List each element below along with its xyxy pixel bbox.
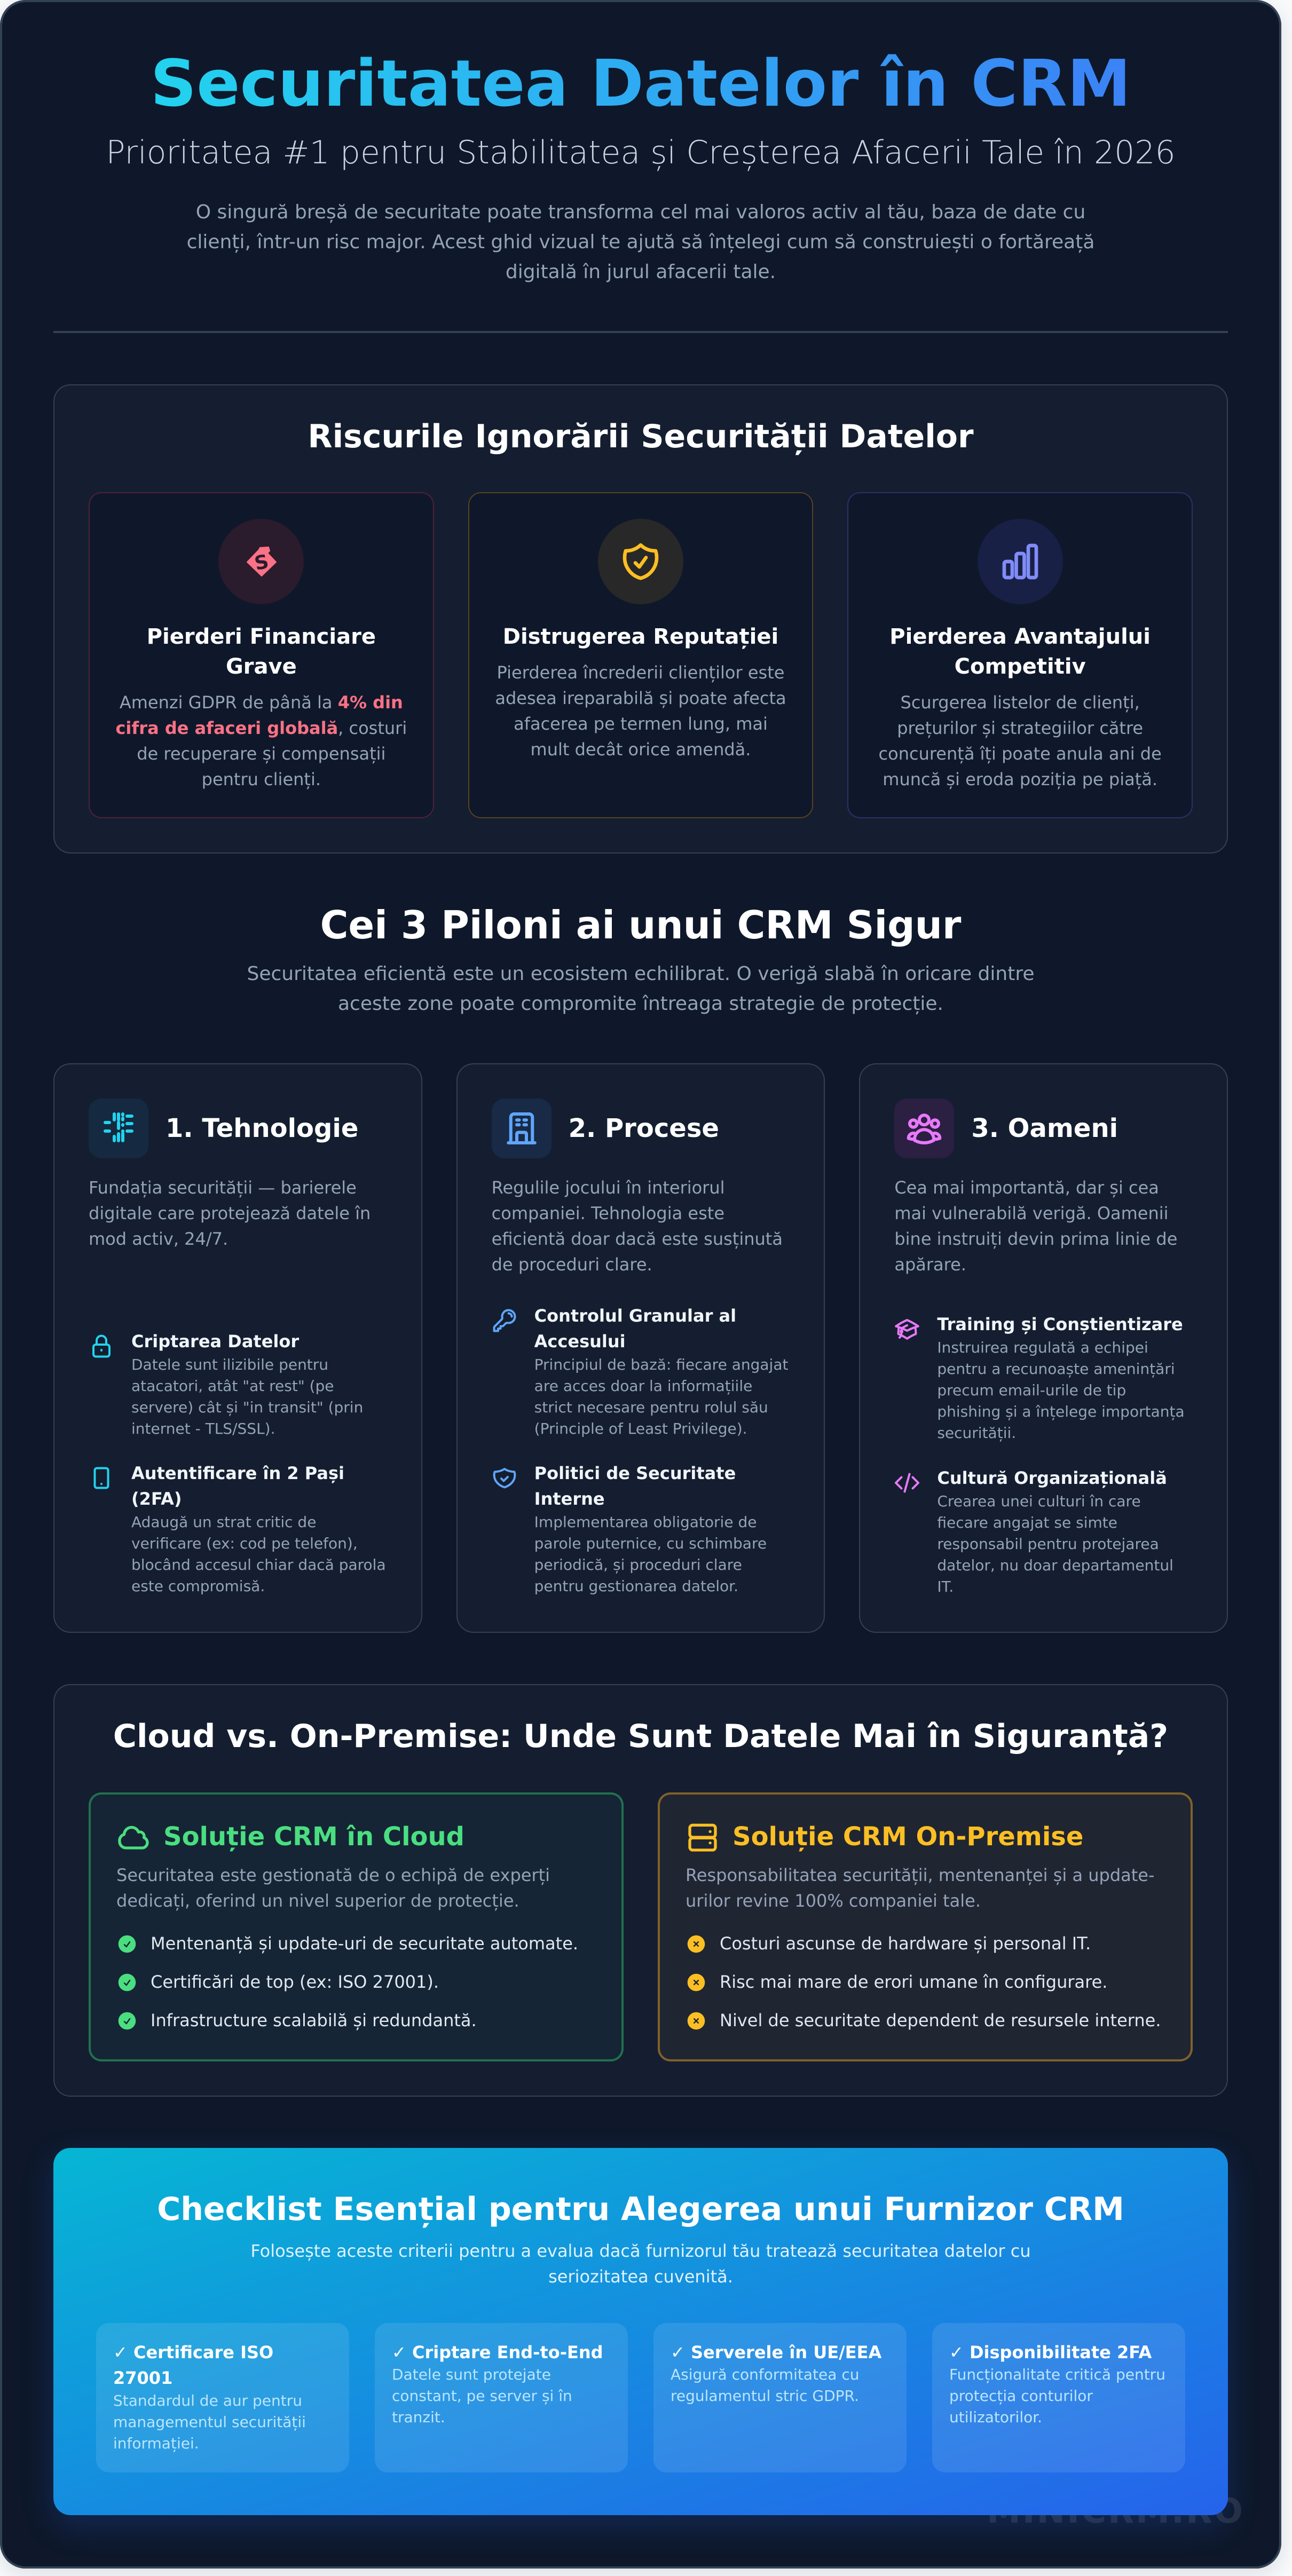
- item: 2FA: Autentificare în 2 Pași: [131, 1463, 344, 1483]
- card text: adesea ireparabilă și poate afecta: [495, 688, 786, 708]
- item: access control: (Principle of Least Privilege).: [534, 1420, 747, 1437]
- card heading: Pierderi Financiare: [147, 625, 376, 649]
- card text: [879, 692, 1162, 789]
- heading: checklist: Checklist Esențial pentru Alegerea unui Furnizor CRM: [157, 2191, 1124, 2228]
- card text: concurență îți poate anula ani de: [879, 744, 1162, 764]
- benefit 2: Certificări de top (ex: ISO 27001).: [151, 1972, 439, 1992]
- pillar text: Regulile jocului în interiorul: [492, 1178, 725, 1198]
- cloud text: dedicați, oferind un nivel superior de protecție.: [116, 1891, 519, 1911]
- icon: key: [492, 1308, 517, 1333]
- item: training: Training și Conștientizare: [937, 1314, 1183, 1334]
- check card: EU servers: regulamentul stric GDPR.: [671, 2387, 859, 2405]
- item: access control: strict necesare pentru rolul său: [534, 1398, 768, 1416]
- item: access control: Controlul Granular al: [534, 1306, 736, 1326]
- check card: encryption: tranzit.: [392, 2408, 445, 2426]
- card text: muncă și eroda poziția pe piață.: [883, 769, 1157, 789]
- pillar text: companiei. Tehnologia este: [492, 1203, 724, 1223]
- icon: shield check: [598, 519, 683, 604]
- cloud text: Securitatea este gestionată de o echipă de experți: [116, 1865, 550, 1885]
- item: culture: Cultură Organizațională: [937, 1468, 1167, 1488]
- panel: checklist: [53, 2148, 1228, 2515]
- card text: prețurilor și strategiilor către: [897, 718, 1143, 738]
- pillar text: Cea mai importantă, dar și cea: [894, 1178, 1159, 1198]
- pillars intro: Securitatea eficientă este un ecosistem echilibrat. O verigă slabă în oricare dintre: [247, 963, 1035, 985]
- card: cloud: [89, 1792, 624, 2061]
- cloud text: [116, 1862, 550, 1914]
- icon: graduation cap: [894, 1316, 920, 1342]
- heading: risks: Riscurile Ignorării Securității Datelor: [308, 418, 974, 455]
- icon: users: [894, 1099, 954, 1158]
- heading: comparison: Cloud vs. On-Premise: Unde Sunt Datele Mai în Siguranță?: [113, 1718, 1168, 1755]
- item: access control: [492, 1303, 790, 1441]
- item: training: precum email-urile de tip: [937, 1381, 1126, 1399]
- card text: de recuperare și compensații: [137, 744, 385, 764]
- check card: ISO: [96, 2323, 349, 2472]
- checklist intro: seriozitatea cuvenită.: [548, 2266, 733, 2287]
- item: culture: IT.: [937, 1578, 954, 1595]
- item: policies: periodică, și proceduri clare: [534, 1556, 742, 1574]
- check card: 2FA: utilizatorilor.: [949, 2408, 1042, 2426]
- on-premise text: [686, 1862, 1155, 1914]
- check card: ISO: managementul securității: [113, 2413, 306, 2431]
- card text: afacerea pe termen lung, mai: [514, 714, 768, 734]
- check card: EU servers: [653, 2323, 907, 2472]
- drawback 2: [686, 1969, 1165, 1995]
- pillar text: mai vulnerabilă verigă. Oamenii: [894, 1203, 1169, 1223]
- item: encryption: atacatori, atât "at rest" (pe: [131, 1377, 334, 1395]
- pillar heading: 1. Tehnologie: [166, 1113, 358, 1143]
- item: policies: Implementarea obligatorie de: [534, 1513, 757, 1531]
- panel: risks: [53, 384, 1228, 854]
- item: access control: are acces doar la informațiile: [534, 1377, 752, 1395]
- pillar text: mod activ, 24/7.: [89, 1229, 228, 1249]
- card heading: Grave: [226, 654, 297, 679]
- panel: cloud vs on-premise: [53, 1684, 1228, 2097]
- pillar text: apărare.: [894, 1254, 966, 1275]
- check card: 2FA: protecția conturilor: [949, 2387, 1093, 2405]
- benefit 1: Mentenanță și update-uri de securitate automate.: [151, 1933, 578, 1954]
- card text: Amenzi GDPR de până la 4% din: [120, 692, 403, 713]
- subtitle: Prioritatea #1 pentru Stabilitatea și Creșterea Afacerii Tale în 2026: [106, 134, 1176, 171]
- drawback 2: Risc mai mare de erori umane în configurare.: [720, 1972, 1107, 1992]
- item: policies: pentru gestionarea datelor.: [534, 1577, 738, 1595]
- card text: mult decât orice amendă.: [531, 739, 751, 760]
- item: encryption: [92, 1331, 363, 1437]
- item: encryption: Datele sunt ilizibile pentru: [131, 1356, 328, 1373]
- check card: ISO: Standardul de aur pentru: [113, 2392, 302, 2409]
- intro paragraph: digitală în jurul afacerii tale.: [506, 261, 776, 283]
- icon: cloud: [116, 1820, 151, 1854]
- item: training: pentru a recunoaște amenințări: [937, 1360, 1175, 1378]
- check card: 2FA: [932, 2323, 1185, 2472]
- item: 2FA: verificare (ex: cod pe telefon),: [131, 1535, 358, 1552]
- check card: 2FA: ✓ Disponibilitate 2FA: [949, 2342, 1152, 2362]
- check card: EU servers: Asigură conformitatea cu: [671, 2366, 860, 2383]
- check card: encryption: [375, 2323, 628, 2472]
- panel: people pillar: [859, 1063, 1228, 1633]
- card text: Pierderea încrederii clienților este: [497, 662, 784, 683]
- on-premise text: urilor revine 100% companiei tale.: [686, 1891, 981, 1911]
- check card: encryption: constant, pe server și în: [392, 2387, 572, 2405]
- panel: processes pillar: [456, 1063, 825, 1633]
- item: culture: responsabil pentru protejarea: [937, 1535, 1159, 1553]
- card text: [115, 692, 407, 789]
- icon: bar chart: [978, 519, 1063, 604]
- item: policies: parole puternice, cu schimbare: [534, 1535, 767, 1552]
- check card: encryption: ✓ Criptare End-to-End: [392, 2342, 603, 2362]
- card text: cifra de afaceri globală, costuri: [115, 718, 407, 738]
- card text: [495, 662, 786, 760]
- card: on-premise: [658, 1792, 1193, 2061]
- intro paragraph: O singură breșă de securitate poate transforma cel mai valoros activ al tău, baza de date cu: [196, 201, 1085, 223]
- check card: encryption: Datele sunt protejate: [392, 2366, 551, 2383]
- pillar text: [894, 1175, 1177, 1277]
- panel: technology pillar: [53, 1063, 422, 1633]
- card heading: [147, 625, 376, 679]
- card heading: Distrugerea Reputației: [503, 625, 778, 649]
- on-premise heading: Soluție CRM On-Premise: [732, 1822, 1083, 1852]
- pillars intro: [247, 963, 1035, 1015]
- benefit 2: [116, 1969, 596, 1995]
- card text: pentru clienți.: [202, 769, 321, 789]
- item: access control: Accesului: [534, 1331, 626, 1352]
- check card: EU servers: ✓ Serverele în UE/EEA: [671, 2342, 881, 2362]
- icon: chip: [89, 1099, 148, 1158]
- intro paragraph: [187, 201, 1094, 283]
- icon: dollar tag: [218, 519, 304, 604]
- benefit 3: [116, 2008, 596, 2033]
- item: 2FA: Adaugă un strat critic de: [131, 1513, 316, 1531]
- item: encryption: servere) cât și "in transit" (prin: [131, 1398, 363, 1416]
- checklist intro: [53, 2238, 1228, 2289]
- item: culture: [894, 1465, 1192, 1599]
- icon: server: [686, 1820, 720, 1854]
- card: financial losses: [89, 492, 434, 818]
- item: access control: Principiul de bază: fiecare angajat: [534, 1356, 788, 1373]
- pillar text: bine instruiți devin prima linie de: [894, 1229, 1177, 1249]
- pillar text: digitale care protejează datele în: [89, 1203, 371, 1223]
- card: competitive advantage: [847, 492, 1193, 818]
- watermark: MINICRM.RO: [987, 2492, 1244, 2531]
- icon: phone: [89, 1465, 114, 1491]
- item: policies: [492, 1460, 790, 1597]
- item: 2FA: blocând accesul chiar dacă parola: [131, 1556, 386, 1574]
- card heading: Pierderea Avantajului: [889, 625, 1151, 649]
- icon: dollar tag: S: [253, 551, 271, 575]
- item: 2FA: este compromisă.: [131, 1577, 265, 1595]
- item: policies: Politici de Securitate: [534, 1463, 736, 1483]
- icon: code: [894, 1470, 920, 1496]
- pillar text: [89, 1178, 371, 1249]
- pillar text: de proceduri clare.: [492, 1254, 652, 1275]
- item: 2FA: (2FA): [131, 1489, 182, 1509]
- check card: 2FA: Funcționalitate critică pentru: [949, 2366, 1165, 2383]
- icon: shield: [492, 1465, 517, 1491]
- item: 2FA: [94, 1463, 386, 1595]
- card heading: Competitiv: [955, 654, 1086, 679]
- item: culture: Crearea unei culturi în care: [937, 1492, 1141, 1510]
- pillar text: [492, 1175, 783, 1277]
- card heading: [889, 625, 1151, 679]
- item: training: Instruirea regulată a echipei: [937, 1339, 1148, 1356]
- intro paragraph: clienți, într-un risc major. Acest ghid vizual te ajută să înțelegi cum să construiești o fortăreață: [187, 231, 1094, 253]
- pillar heading: 2. Procese: [569, 1113, 719, 1143]
- check card: ISO: ✓ Certificare ISO: [113, 2342, 273, 2362]
- item: training: phishing și a înțelege importanța: [937, 1403, 1185, 1420]
- pillars intro: aceste zone poate compromite întreaga strategie de protecție.: [338, 993, 943, 1015]
- check card: ISO: 27001: [113, 2368, 172, 2388]
- item: training: [894, 1311, 1192, 1445]
- item: encryption: internet - TLS/SSL).: [131, 1420, 275, 1437]
- heading: pillars: Cei 3 Piloni ai unui CRM Sigur: [320, 903, 961, 947]
- item: culture: fiecare angajat se simte: [937, 1514, 1117, 1531]
- pillar text: eficientă doar dacă este susținută: [492, 1229, 783, 1249]
- on-premise text: Responsabilitatea securității, mentenanței și a update-: [686, 1865, 1155, 1885]
- title: Securitatea Datelor în CRM: [151, 47, 1131, 121]
- check card: ISO: informației.: [113, 2435, 199, 2452]
- card text: Scurgerea listelor de clienți,: [900, 692, 1140, 713]
- item: encryption: Criptarea Datelor: [131, 1331, 299, 1352]
- cloud heading: Soluție CRM în Cloud: [163, 1822, 464, 1852]
- drawback 1: Costuri ascunse de hardware și personal IT.: [720, 1933, 1091, 1954]
- drawback 1: [686, 1931, 1165, 1956]
- item: training: securității.: [937, 1424, 1016, 1442]
- icon: building: [492, 1099, 552, 1158]
- pillar heading: 3. Oameni: [971, 1113, 1118, 1143]
- pillar text: Fundația securității — barierele: [89, 1178, 357, 1198]
- item: policies: Interne: [534, 1489, 605, 1509]
- card: reputation: [468, 492, 813, 818]
- checklist intro: Folosește aceste criterii pentru a evalua dacă furnizorul tău tratează securitatea datelor cu: [250, 2241, 1031, 2261]
- drawback 3: Nivel de securitate dependent de resursele interne.: [720, 2010, 1161, 2030]
- benefit 3: Infrastructure scalabilă și redundantă.: [151, 2010, 477, 2030]
- item: culture: datelor, nu doar departamentul: [937, 1556, 1173, 1574]
- icon: lock: [92, 1334, 111, 1358]
